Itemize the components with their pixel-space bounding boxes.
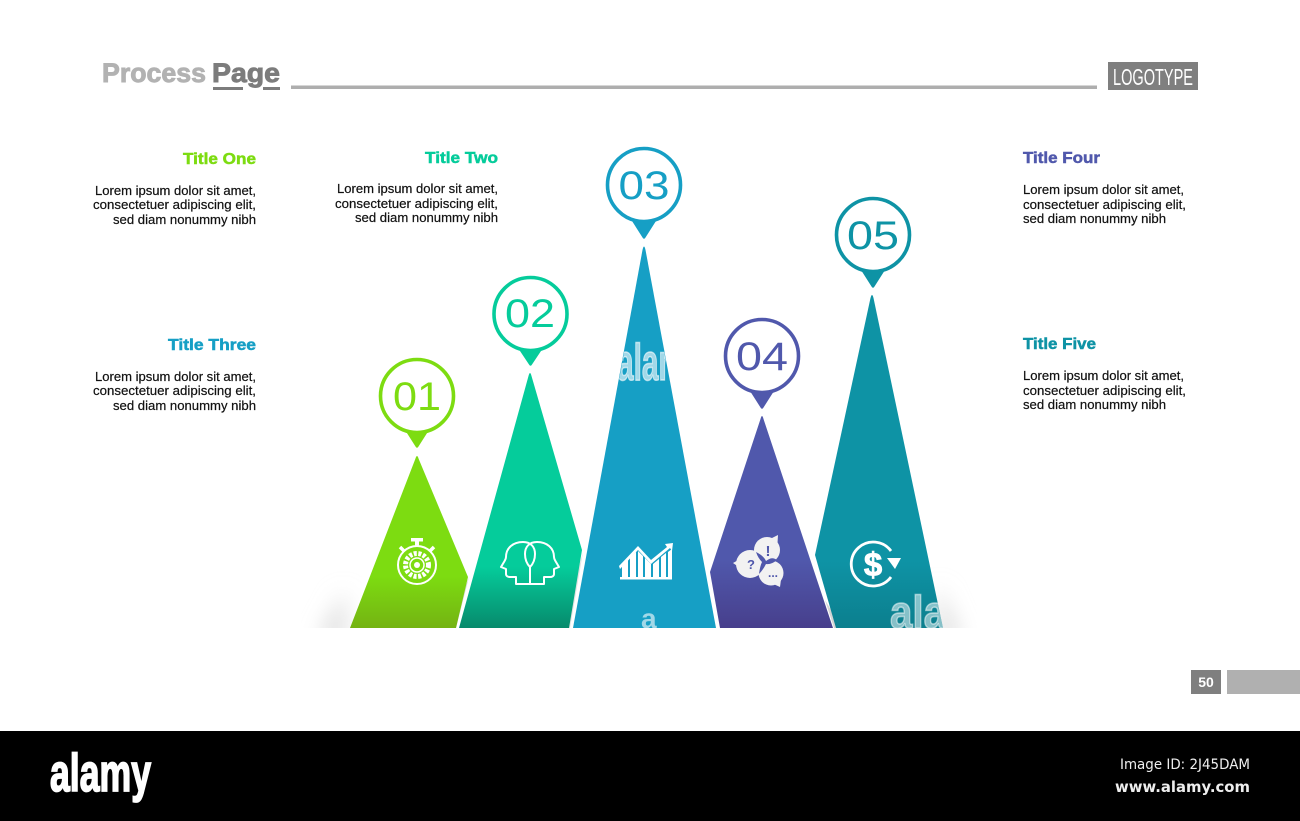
text block: Title Three: sed diam nonummy nibh: [113, 398, 256, 413]
logotype badge: LOGOTYPE: [1113, 64, 1193, 90]
text block: Title Four: Lorem ipsum dolor sit amet,: [1023, 182, 1184, 197]
text block: Title Five: consectetuer adipiscing elit,: [1023, 383, 1186, 398]
icon: speech bubbles: !: [766, 543, 770, 560]
text block: Title Three: Lorem ipsum dolor sit amet,: [95, 369, 256, 384]
watermark fragments: a: [641, 603, 657, 634]
text block: Title Three: consectetuer adipiscing elit,: [93, 383, 256, 398]
watermark fragments: alam: [617, 334, 685, 392]
text block: Title Five: Lorem ipsum dolor sit amet,: [1023, 368, 1184, 383]
text block: Title One: [93, 151, 256, 227]
text block: Title Two: consectetuer adipiscing elit,: [335, 196, 498, 211]
icon: speech bubbles: ...: [768, 566, 778, 580]
text block: Title Four: consectetuer adipiscing elit,: [1023, 197, 1186, 212]
image id: Image ID: 2J45DAM: [1120, 757, 1250, 773]
text block: Title Five: [1023, 336, 1186, 412]
icon: dollar cycle: [851, 542, 901, 586]
watermark fragments: ala: [890, 586, 946, 638]
footer bar: [0, 731, 1300, 821]
title: Process Page: [102, 58, 280, 90]
icon: speech bubbles: [733, 535, 784, 587]
text block: Title One: Title One: [183, 151, 256, 168]
header: [102, 58, 1198, 90]
pin 04: [726, 320, 798, 409]
floor shadow: [318, 552, 962, 640]
text block: Title Three: [93, 337, 256, 413]
chart: peak bars: [318, 246, 962, 640]
icon: growth chart: [619, 543, 673, 580]
text block: Title Two: Lorem ipsum dolor sit amet,: [337, 181, 498, 196]
logotype badge: [1108, 62, 1198, 90]
pin 04: 04: [736, 335, 788, 379]
pin 01: [380, 360, 454, 448]
alamy logo: alamy: [50, 744, 151, 803]
text block: Title Two: [335, 150, 498, 225]
icon: dollar cycle: $: [864, 546, 882, 583]
title: Process Page: Page: [212, 58, 280, 88]
text block: Title Three: Title Three: [168, 337, 256, 354]
bar 2: [459, 373, 582, 628]
pin 05: [836, 198, 910, 288]
title: Process Page: Process: [102, 58, 206, 88]
text block: Title One: consectetuer adipiscing elit,: [93, 197, 256, 212]
pin 01: 01: [393, 375, 441, 419]
icon: stopwatch gear: [398, 538, 436, 584]
watermark fragments: [617, 334, 946, 638]
website: www.alamy.com: [1115, 778, 1250, 796]
text block: Title Four: Title Four: [1023, 150, 1100, 167]
text block: Title Two: Title Two: [425, 150, 498, 167]
bar 3: [573, 246, 716, 628]
page number: [1191, 670, 1300, 694]
pin 03: 03: [618, 164, 670, 208]
text block: Title Four: [1023, 150, 1186, 226]
bar 4: [710, 416, 833, 628]
pin 05: 05: [847, 214, 899, 258]
text block: Title Four: sed diam nonummy nibh: [1023, 211, 1166, 226]
text block: Title Five: Title Five: [1023, 336, 1096, 353]
pin 02: [494, 278, 567, 366]
text block: Title One: sed diam nonummy nibh: [113, 212, 256, 227]
bar 1: [350, 456, 468, 628]
page number: 50: [1198, 674, 1214, 690]
text block: Title One: Lorem ipsum dolor sit amet,: [95, 183, 256, 198]
pin 03: [608, 148, 680, 239]
icon: speech bubbles: ?: [747, 557, 755, 572]
text block: Title Two: sed diam nonummy nibh: [355, 210, 498, 225]
pin 02: 02: [505, 292, 555, 336]
bar 5: [815, 295, 943, 628]
icon: two heads: [501, 542, 559, 584]
text block: Title Five: sed diam nonummy nibh: [1023, 397, 1166, 412]
